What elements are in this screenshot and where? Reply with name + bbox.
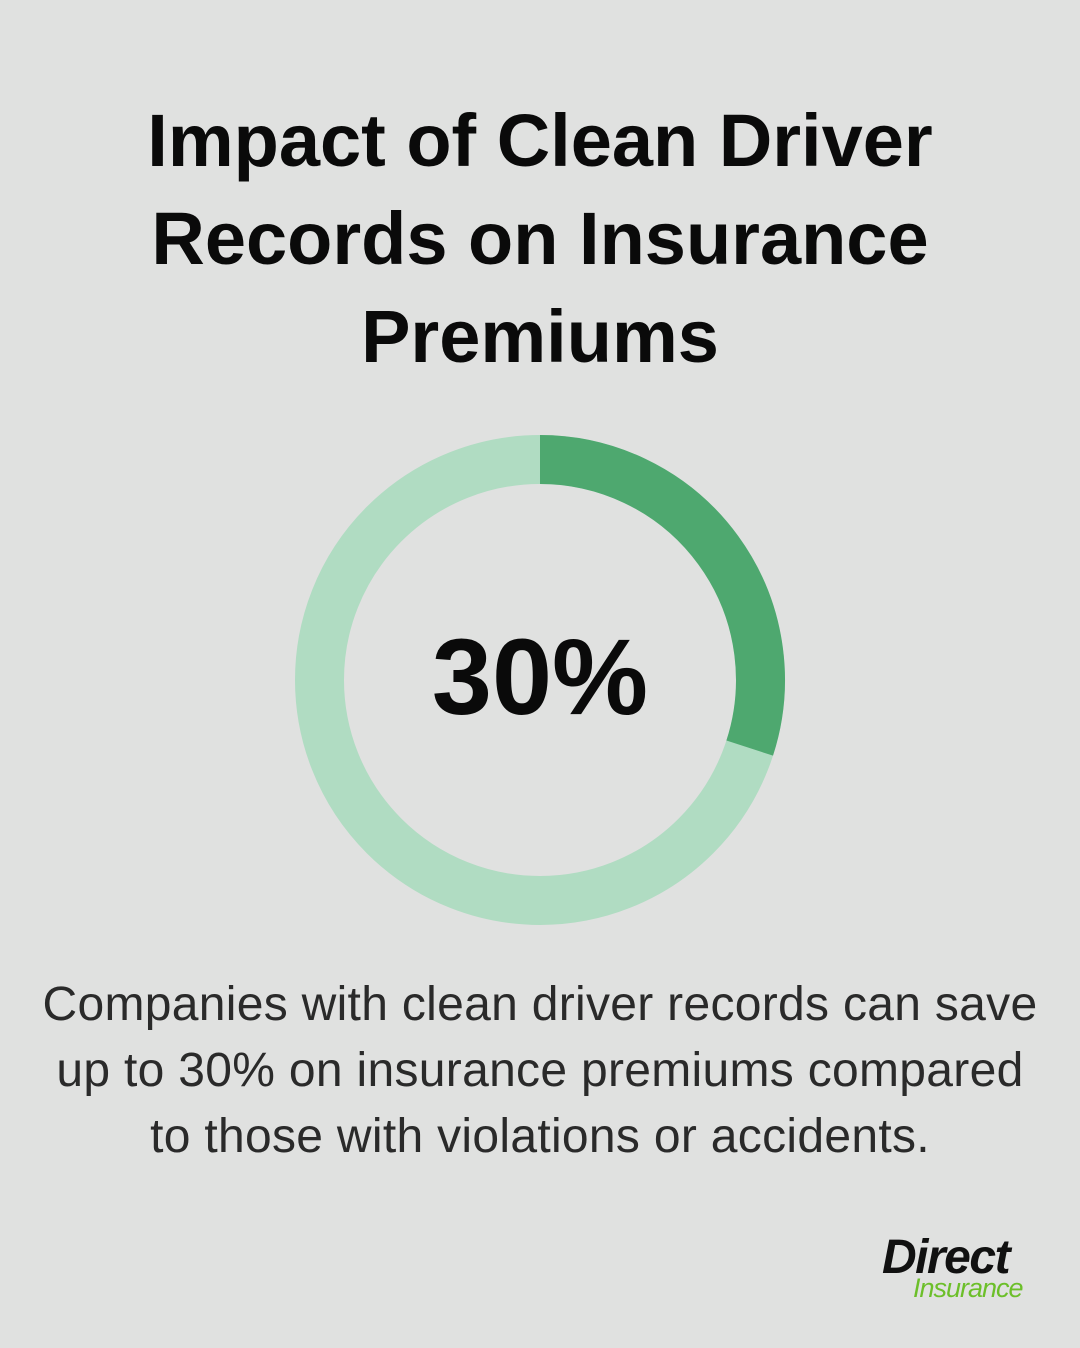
body text: to those with violations or accidents. [150,1110,930,1163]
body text: up to 30% on insurance premiums compared [56,1044,1024,1097]
donut chart: 30% [432,616,648,737]
title [147,99,933,378]
logo: Insurance [913,1273,1023,1303]
title: Records on Insurance [151,197,929,280]
title: Impact of Clean Driver [147,99,933,182]
title: Premiums [361,295,719,378]
body text [42,978,1037,1163]
body text: Companies with clean driver records can save [42,978,1037,1031]
logo [882,1231,1023,1303]
logo: Direct [882,1231,1009,1284]
